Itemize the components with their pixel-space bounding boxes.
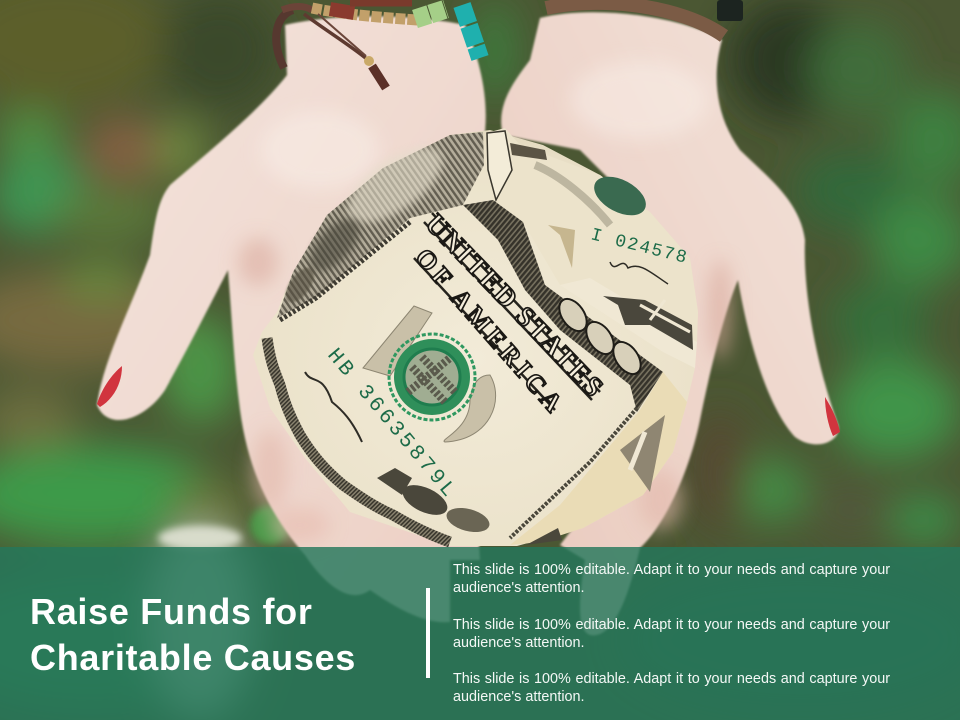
icon: red nails [97,366,840,436]
text block: descriptions: This slide is 100% editable. Adapt it to your needs and capture your audience's attention. [453,671,890,705]
panel: text banner [0,547,960,720]
top fold area [487,128,698,342]
left signature [305,372,362,442]
portrait engraving [277,132,484,320]
text block: descriptions [453,562,890,705]
heading: Charitable Causes [30,637,356,678]
text block: descriptions: This slide is 100% editable. Adapt it to your needs and capture your audience's attention. [453,616,890,650]
serrated edge line [510,408,637,538]
right fold panel [560,278,697,368]
lower right fold [510,372,687,545]
right serial number: I 024578 [589,225,688,269]
icon: small green seal [588,169,652,223]
bottom 100 engraving [377,468,492,536]
note silhouette [253,130,698,546]
icon: green treasury seal [389,334,475,420]
left hand [97,16,486,622]
crumpled banknote ball [253,128,698,546]
engraved band [463,200,663,412]
100 ovals on band [554,294,646,379]
ornate left and bottom border [267,338,450,542]
lettering: United States of America: UNITED STATES [419,208,609,403]
large 100 [363,306,496,442]
left serial number: HB 36635879L [322,345,459,502]
right signature [610,262,668,284]
bracelets [276,0,743,88]
vertical divider [426,588,430,678]
palm shading [238,60,732,543]
heading: Raise Funds for [30,591,313,632]
right hand [501,12,838,635]
lettering: United States of America: OF AMERICA [409,243,568,418]
heading [30,591,356,678]
text block: descriptions: This slide is 100% editable. Adapt it to your needs and capture your audience's attention. [453,562,890,596]
